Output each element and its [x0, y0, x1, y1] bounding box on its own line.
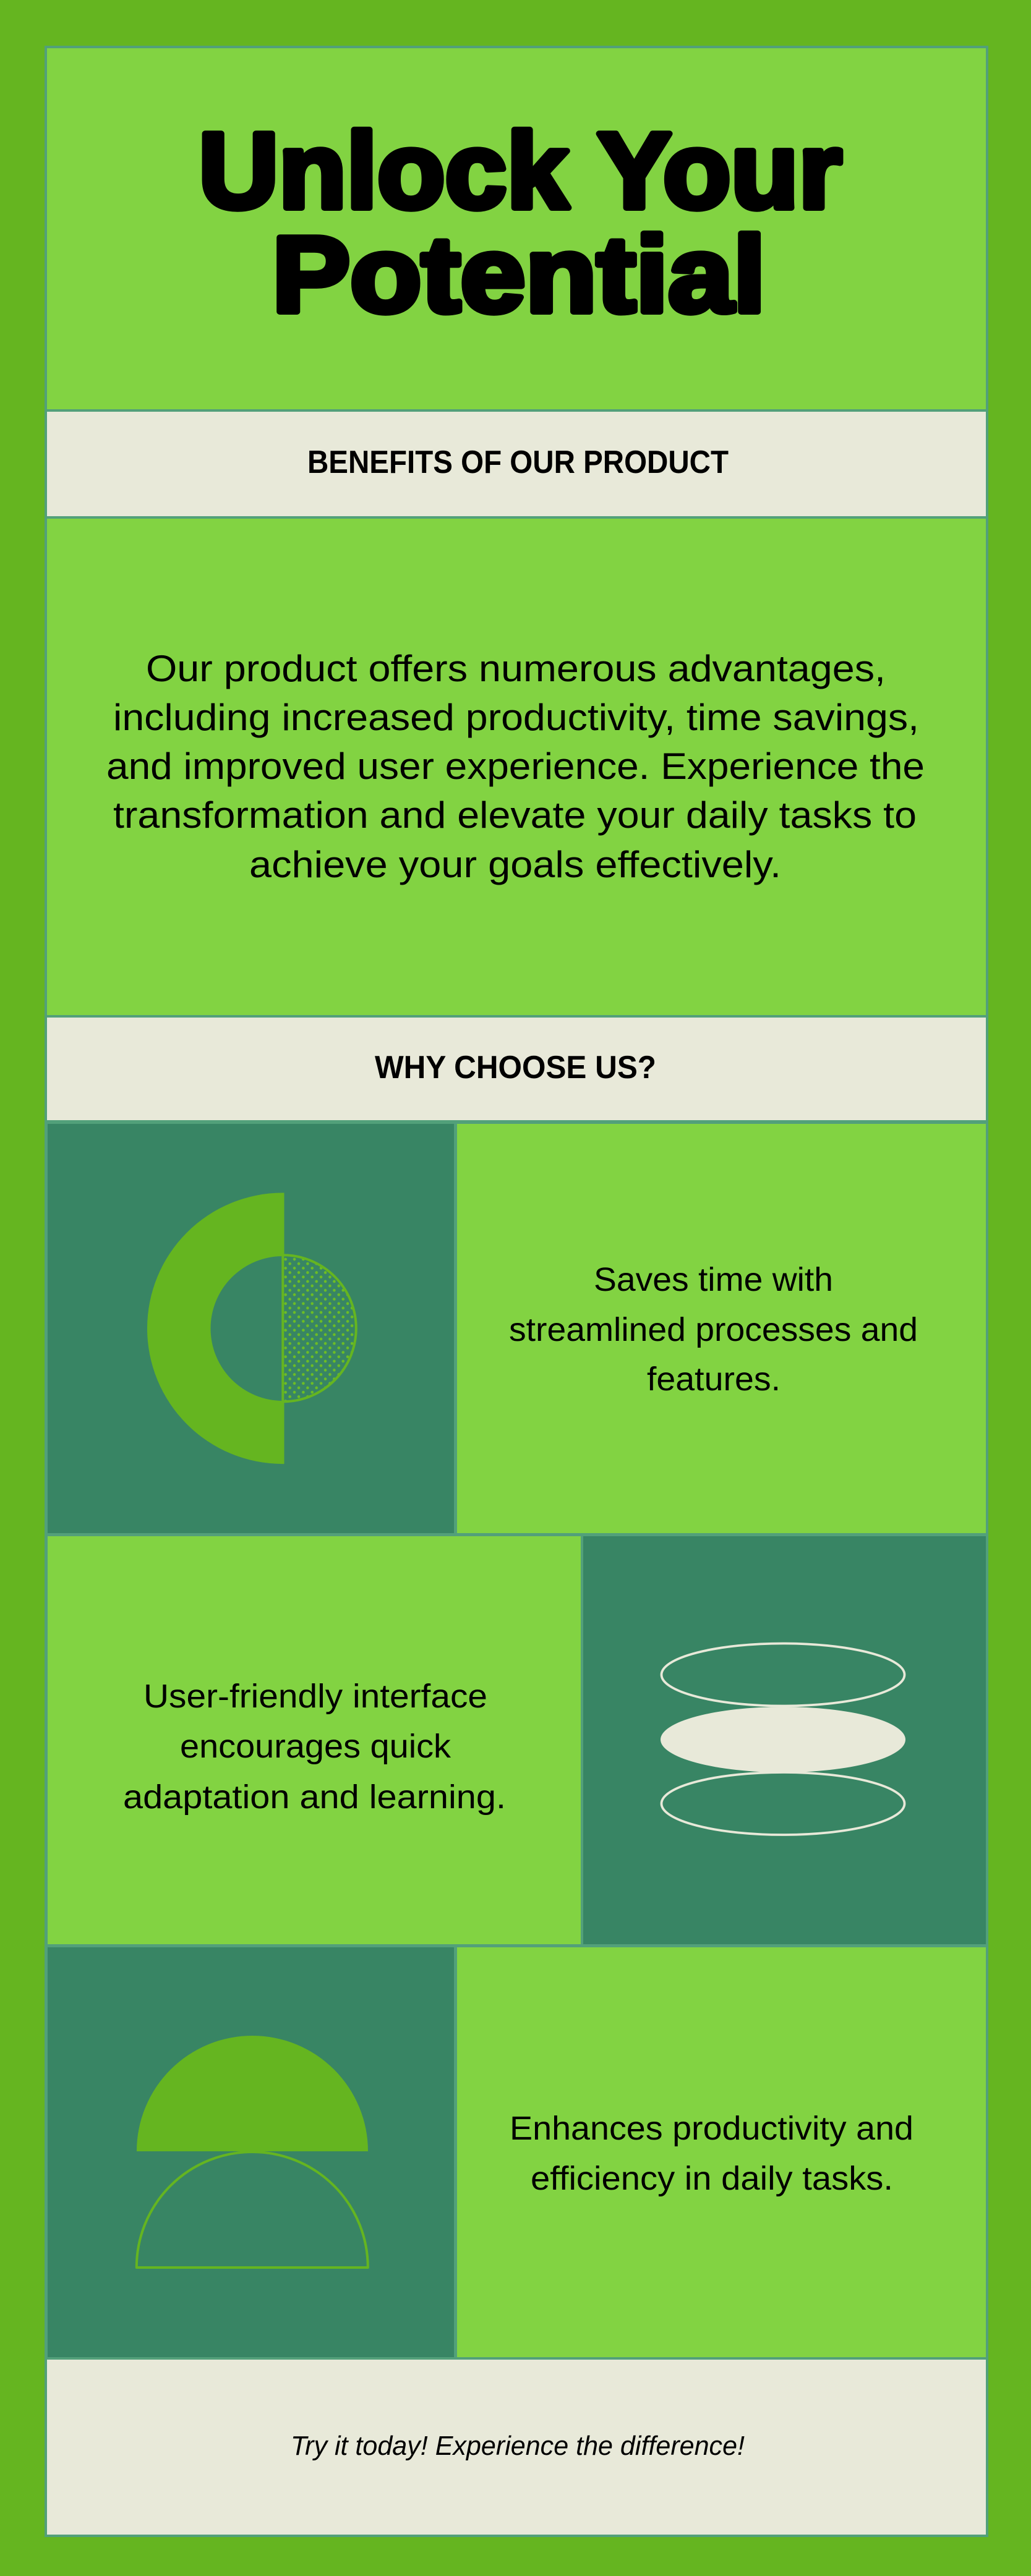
text: benefits paragraph: including increased productivity, time savings,	[113, 697, 919, 738]
text: user-friendly interface: User-friendly interface	[143, 1678, 487, 1715]
panel: feature 2 icon	[583, 1536, 986, 1944]
panel: feature 2 text	[48, 1536, 581, 1944]
text: user-friendly interface: adaptation and learning.	[123, 1779, 506, 1816]
panel: footer	[47, 2360, 986, 2535]
text: benefits paragraph: transformation and elevate your daily tasks to	[113, 794, 917, 836]
panel: feature 1 text	[457, 1124, 986, 1533]
text: saves time: Saves time with	[594, 1261, 833, 1298]
panel: hero	[47, 48, 986, 409]
text: benefits paragraph	[106, 648, 925, 885]
text: enhances productivity: Enhances productivity and	[510, 2110, 913, 2147]
heading: why choose us: WHY CHOOSE US?	[375, 1050, 656, 1086]
heading: benefits of our product: BENEFITS OF OUR PRODUCT	[307, 444, 729, 480]
panel: benefits description	[47, 519, 986, 1015]
text: enhances productivity	[510, 2110, 913, 2197]
text: benefits paragraph: and improved user experience. Experience the	[106, 746, 925, 787]
text: user-friendly interface	[123, 1678, 506, 1816]
icon: three stacked ellipses	[661, 1643, 905, 1835]
panel: feature 3 text	[457, 1947, 986, 2357]
text: call to action: Try it today! Experience the difference!	[291, 2431, 745, 2461]
panel: feature 3 icon	[48, 1947, 454, 2357]
panel: why choose us heading band	[47, 1018, 986, 1120]
panel: feature 1 icon	[48, 1124, 454, 1533]
title: Potential	[272, 214, 766, 334]
panel: benefits heading band	[47, 412, 986, 516]
text: saves time	[509, 1261, 918, 1398]
title	[199, 110, 842, 334]
icon: half ring with dotted half circle	[147, 1193, 357, 1464]
text: saves time: features.	[647, 1361, 781, 1398]
text: benefits paragraph: achieve your goals effectively.	[249, 844, 781, 885]
title: Unlock Your	[199, 110, 842, 231]
text: user-friendly interface: encourages quick	[180, 1728, 451, 1765]
text: saves time: streamlined processes and	[509, 1311, 918, 1348]
text: benefits paragraph: Our product offers numerous advantages,	[146, 648, 886, 689]
text: enhances productivity: efficiency in daily tasks.	[531, 2160, 893, 2197]
icon: stacked semicircles	[137, 2036, 368, 2268]
